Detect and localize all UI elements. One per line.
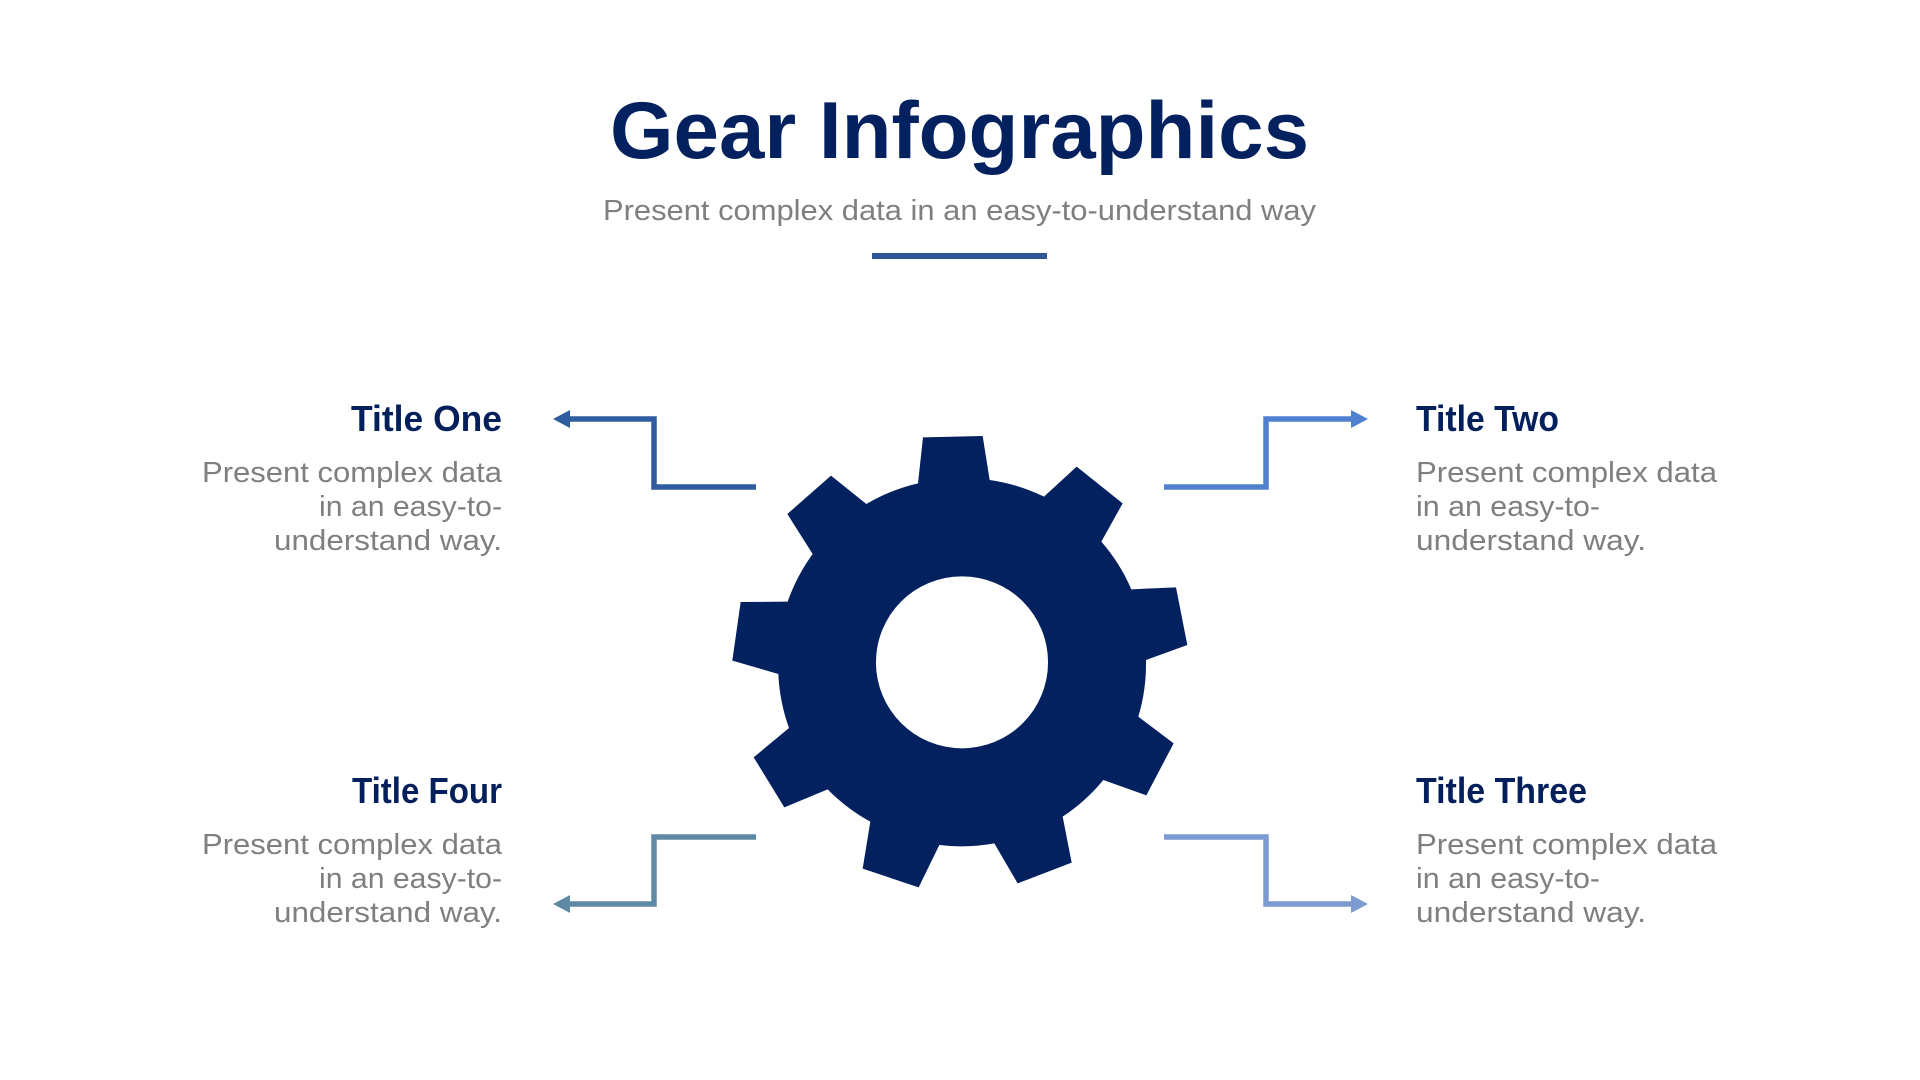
text block: title two: Title Two bbox=[1416, 398, 1559, 439]
text block: title three: Title Three bbox=[1416, 770, 1587, 811]
text block: title one: understand way. bbox=[274, 525, 502, 557]
arrow: to title two bbox=[1164, 410, 1368, 487]
text block: title two: in an easy-to- bbox=[1416, 491, 1600, 523]
text block: title one bbox=[202, 398, 503, 557]
text block: title four bbox=[202, 770, 503, 929]
text block: title one: Title One bbox=[351, 398, 502, 439]
subtitle: Present complex data in an easy-to-understand way bbox=[603, 195, 1317, 227]
arrow: to title one bbox=[553, 410, 756, 487]
text block: title three: understand way. bbox=[1416, 897, 1646, 929]
title underline bbox=[872, 253, 1047, 259]
text block: title two: Present complex data bbox=[1416, 457, 1718, 489]
text block: title two bbox=[1416, 398, 1718, 557]
text block: title four: Present complex data bbox=[202, 829, 503, 861]
arrow: to title three bbox=[1164, 837, 1368, 913]
text block: title one: Present complex data bbox=[202, 457, 503, 489]
text block: title one: in an easy-to- bbox=[319, 491, 502, 523]
arrow: to title four bbox=[553, 837, 756, 913]
text block: title three bbox=[1416, 770, 1718, 929]
text block: title four: Title Four bbox=[352, 770, 502, 811]
text block: title two: understand way. bbox=[1416, 525, 1646, 557]
text block: title four: understand way. bbox=[274, 897, 502, 929]
title: Gear Infographics bbox=[610, 86, 1309, 176]
text block: title four: in an easy-to- bbox=[319, 863, 502, 895]
icon: central gear bbox=[732, 436, 1187, 887]
text block: title three: Present complex data bbox=[1416, 829, 1718, 861]
text block: title three: in an easy-to- bbox=[1416, 863, 1600, 895]
